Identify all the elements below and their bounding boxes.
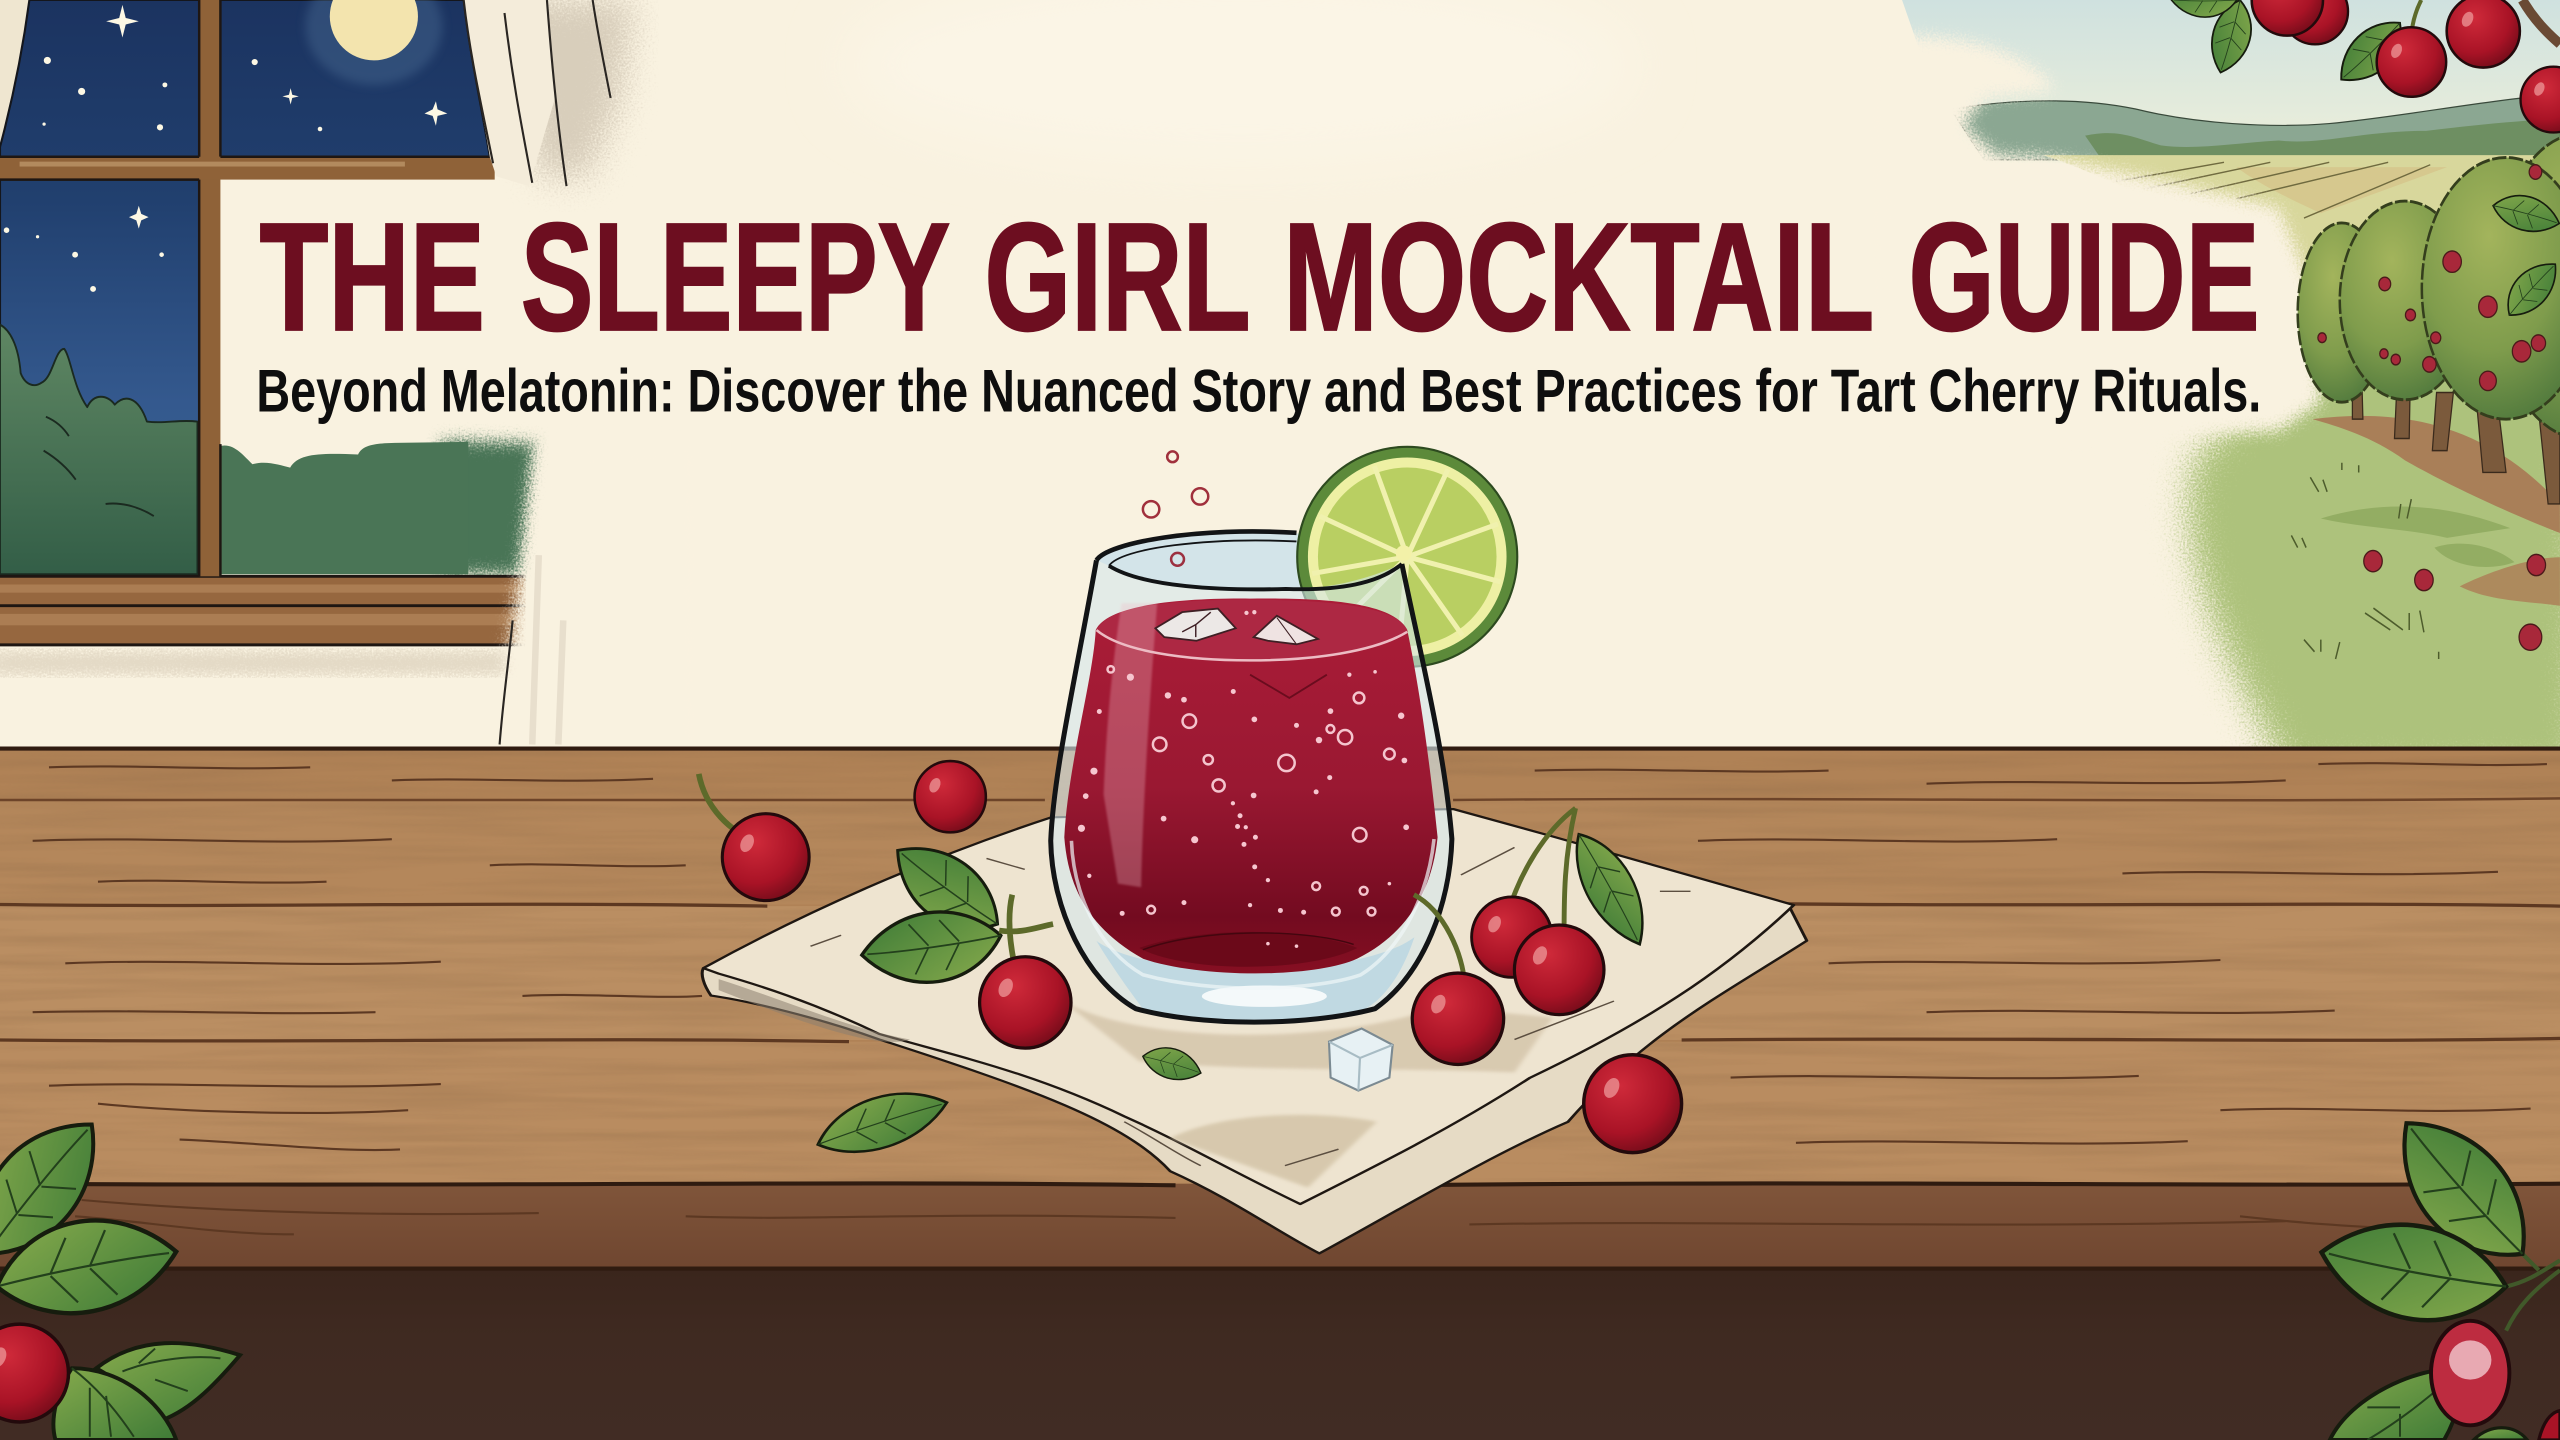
title: THE	[260, 191, 485, 363]
leaf on table	[810, 1077, 954, 1167]
glass base	[1096, 937, 1414, 1020]
cherry: loose, top	[915, 761, 986, 832]
cherry branch, top right	[2171, 0, 2560, 133]
reflection in drink	[1250, 675, 1327, 698]
curtains	[464, 0, 702, 754]
lower curtain	[500, 444, 702, 754]
cherry: napkin left	[980, 895, 1071, 1048]
sky	[1902, 0, 2560, 163]
dark floor band	[0, 1269, 2560, 1440]
title: SLEEPY	[521, 191, 950, 363]
rising bubbles above glass	[1143, 451, 1208, 518]
red cherry	[2431, 1321, 2509, 1425]
grass	[2189, 339, 2560, 775]
lower leaf	[2330, 1368, 2460, 1440]
moon glow	[305, 0, 442, 85]
bubble inside rim	[1171, 553, 1184, 566]
sill shadow band on wall	[0, 651, 508, 674]
window sill	[0, 576, 526, 645]
grass darker patches	[2321, 507, 2514, 567]
bubbles in drink	[1108, 666, 1395, 915]
cherry: lower right	[1584, 1055, 1682, 1153]
napkin fold shading	[719, 979, 910, 1042]
cherry: front of glass	[1412, 895, 1504, 1064]
glass opening	[1096, 532, 1402, 589]
tree crowns	[2298, 223, 2386, 402]
title	[260, 191, 2260, 363]
dirt path	[2312, 416, 2560, 533]
leaf below	[53, 1368, 176, 1440]
cherry at edge	[2539, 1411, 2560, 1440]
cherries and leaves on table	[699, 761, 1682, 1167]
tree line	[2085, 119, 2560, 160]
glass of tart cherry mocktail and lime	[1051, 447, 1517, 1022]
title: MOCKTAIL	[1283, 191, 1874, 363]
ice cube	[1329, 1029, 1393, 1091]
glass highlight stripe	[1104, 603, 1157, 887]
leaf pair on napkin	[857, 827, 1015, 992]
window frame bars	[199, 0, 220, 576]
soft cream glow at top centre	[849, 0, 1633, 163]
upper curtain shading	[506, 0, 633, 176]
corner foliage: bottom left	[0, 1097, 240, 1440]
cream title fade over landscape	[1875, 37, 2321, 435]
orchard foreground leaves	[2489, 188, 2560, 326]
grass tufts	[2291, 463, 2439, 659]
ice cubes in drink	[1155, 609, 1236, 641]
trunks	[2352, 388, 2560, 504]
napkin top layer	[703, 809, 1794, 1204]
fallen cherries	[2364, 550, 2546, 650]
liquid bottom arc	[1139, 932, 1357, 967]
plank lines and grain	[0, 749, 2560, 1269]
stars	[4, 5, 447, 292]
lime slice	[1297, 447, 1517, 667]
napkin under layer	[702, 908, 1807, 1253]
table front edge	[0, 1184, 2560, 1269]
small leaf at edge	[2473, 1428, 2527, 1440]
left curtain sliver	[0, 0, 29, 147]
cherry: stemmed, left	[699, 774, 809, 901]
leaf right of cherry	[96, 1343, 240, 1422]
moon	[330, 0, 418, 60]
far hill	[1950, 94, 2560, 160]
trees through right pane	[221, 442, 468, 574]
tree cherries	[2318, 165, 2546, 391]
landscape: sky, hills, field, grass	[1875, 0, 2560, 775]
night sky panes	[0, 0, 490, 575]
trees through right pane, fading edge	[441, 441, 535, 574]
wooden table	[0, 748, 2560, 1440]
small leaf	[1139, 1041, 1205, 1086]
title: GIRL	[984, 191, 1251, 363]
glass outline	[1051, 560, 1452, 1022]
glass body	[1051, 560, 1452, 1022]
field	[2043, 155, 2560, 339]
trees through left pane	[0, 325, 197, 574]
cherry pair, right	[1472, 808, 1661, 1015]
title: GUIDE	[1909, 191, 2260, 363]
window with night sky	[0, 0, 535, 645]
orchard trees	[2298, 133, 2560, 650]
napkin	[702, 809, 1807, 1253]
liquid surface	[1096, 600, 1407, 660]
liquid	[1064, 599, 1438, 973]
corner foliage: bottom right	[2313, 1096, 2560, 1440]
